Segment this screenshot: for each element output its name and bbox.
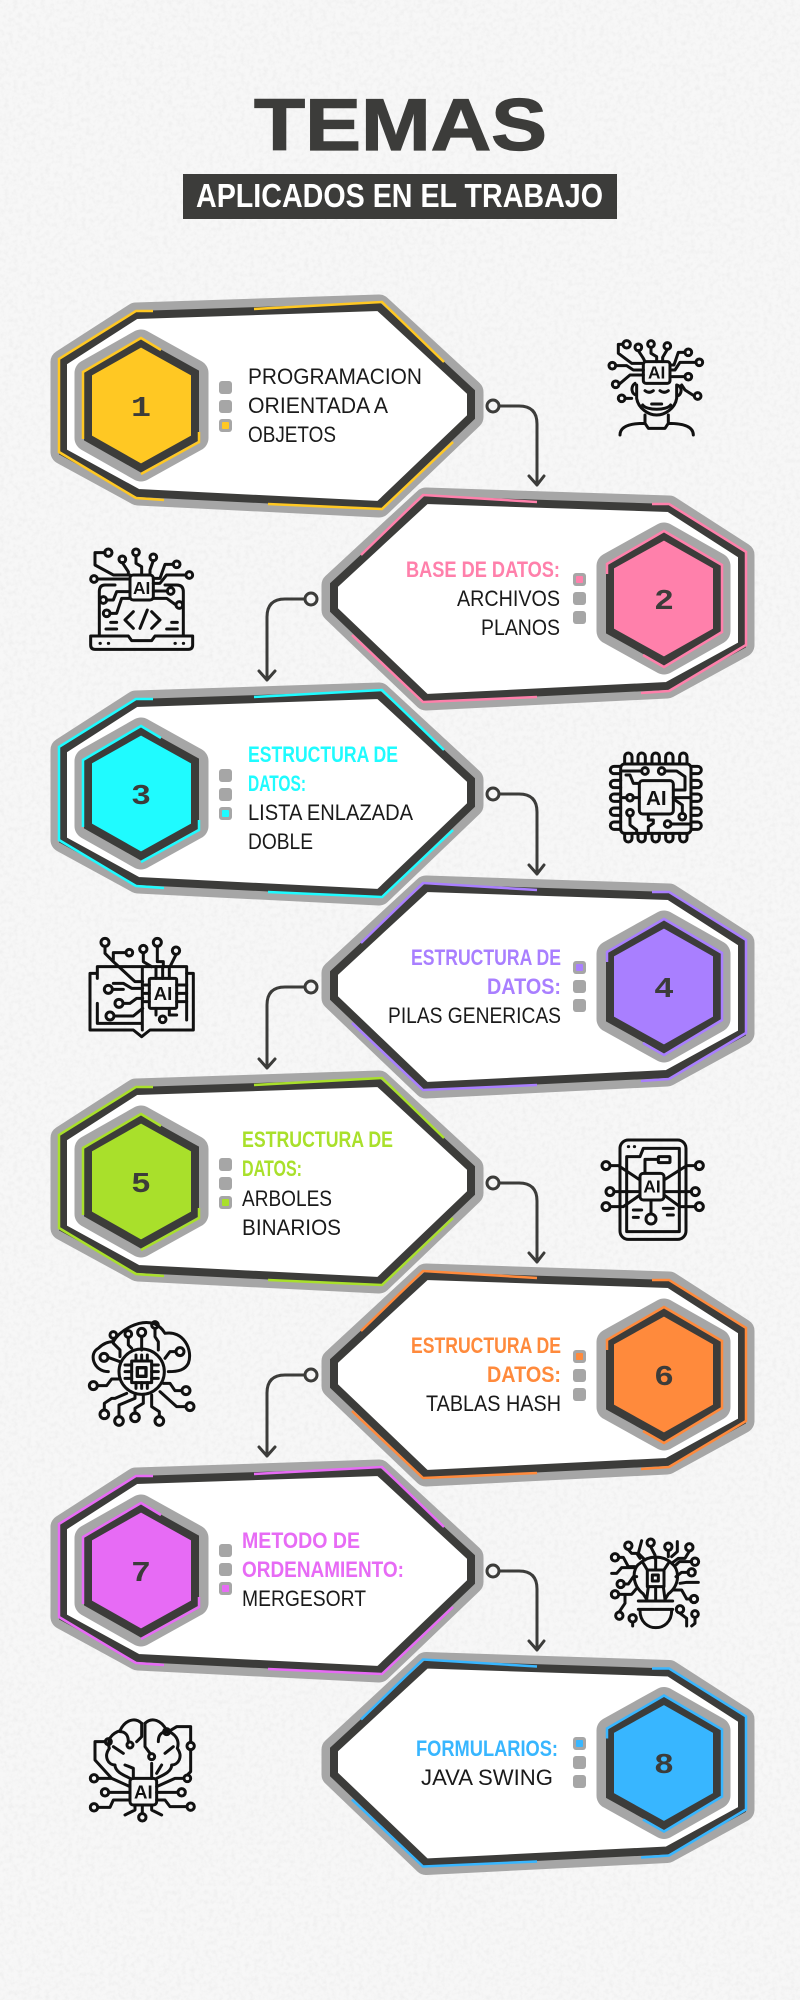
panel: topic 5	[59, 1078, 471, 1285]
text 4	[388, 945, 561, 1028]
panel: topic 4	[334, 883, 746, 1090]
text 3: DOBLE	[248, 829, 313, 854]
arrow 6 to 7	[259, 1369, 317, 1456]
text 6	[411, 1333, 561, 1416]
icon: AI phone	[602, 1140, 703, 1239]
arrow 7 to 8	[487, 1565, 544, 1650]
text 1: ORIENTADA A	[248, 393, 388, 418]
indicator dots 3	[219, 769, 232, 820]
icon: cloud chip	[89, 1322, 194, 1425]
text 8: FORMULARIOS:	[416, 1736, 558, 1761]
number 5: 5	[131, 1168, 151, 1201]
text 2: PLANOS	[481, 615, 560, 640]
text 2: BASE DE DATOS:	[406, 557, 560, 582]
text 3: LISTA ENLAZADA	[248, 800, 413, 825]
icon: AI book	[90, 938, 193, 1037]
icon: AI head: AI	[648, 363, 665, 383]
number 8: 8	[654, 1749, 674, 1782]
title: TEMAS	[254, 85, 547, 166]
text 4: PILAS GENERICAS	[388, 1003, 561, 1028]
icon: AI chip	[610, 753, 701, 842]
text 2	[406, 557, 560, 640]
text 7	[242, 1528, 404, 1611]
text 1: PROGRAMACION	[248, 364, 422, 389]
subtitle banner: APLICADOS EN EL TRABAJO	[196, 177, 603, 214]
indicator dots 8	[573, 1737, 586, 1788]
panel: topic 7	[59, 1467, 471, 1674]
icon: AI brain: AI	[134, 1782, 153, 1803]
text 3: ESTRUCTURA DE	[248, 742, 398, 767]
arrow 4 to 5	[259, 981, 317, 1068]
number 2: 2	[654, 585, 674, 618]
arrow 1 to 2	[487, 400, 544, 485]
number 4: 4	[654, 973, 674, 1006]
number 7: 7	[131, 1557, 151, 1590]
icon: AI brain	[90, 1720, 194, 1821]
text 6: ESTRUCTURA DE	[411, 1333, 561, 1358]
text 5	[242, 1127, 393, 1240]
text 5: ESTRUCTURA DE	[242, 1127, 393, 1152]
indicator dots 6	[573, 1350, 586, 1401]
text 6: TABLAS HASH	[426, 1391, 561, 1416]
arrow 2 to 3	[259, 593, 317, 680]
panel: topic 2	[334, 495, 746, 702]
indicator dots 2	[573, 573, 586, 624]
number 1: 1	[131, 392, 151, 425]
text 5: ARBOLES	[242, 1186, 332, 1211]
indicator dots 7	[219, 1544, 232, 1595]
arrow 3 to 4	[487, 788, 544, 874]
text 7: ORDENAMIENTO:	[242, 1557, 404, 1582]
icon: AI laptop	[91, 549, 193, 649]
icon: AI laptop: AI	[133, 578, 150, 598]
panel: topic 8	[334, 1660, 746, 1866]
icon: AI book: AI	[154, 983, 172, 1004]
text 3	[248, 742, 413, 854]
text 8: JAVA SWING	[421, 1765, 553, 1790]
arrow 5 to 6	[487, 1177, 544, 1262]
icon: AI phone: AI	[643, 1177, 661, 1197]
icon: AI chip: AI	[646, 787, 667, 810]
text 4: ESTRUCTURA DE	[411, 945, 561, 970]
number 3: 3	[131, 780, 151, 813]
panel: topic 3	[59, 690, 471, 897]
text 5: BINARIOS	[242, 1215, 341, 1240]
number 6: 6	[654, 1361, 674, 1394]
indicator dots 1	[219, 381, 232, 432]
panel: topic 6	[334, 1271, 746, 1478]
text 1	[248, 364, 422, 447]
icon: AI head	[609, 341, 703, 435]
icon: AI light bulb	[611, 1539, 699, 1628]
text 3: DATOS:	[248, 771, 306, 796]
indicator dots 4	[573, 961, 586, 1012]
text 6: DATOS:	[487, 1362, 561, 1387]
text 5: DATOS:	[242, 1156, 302, 1181]
text 2: ARCHIVOS	[457, 586, 560, 611]
text 8	[416, 1736, 558, 1790]
text 4: DATOS:	[487, 974, 561, 999]
text 1: OBJETOS	[248, 422, 336, 447]
indicator dots 5	[219, 1158, 232, 1209]
text 7: METODO DE	[242, 1528, 360, 1553]
text 7: MERGESORT	[242, 1586, 366, 1611]
panel: topic 1	[59, 302, 471, 509]
